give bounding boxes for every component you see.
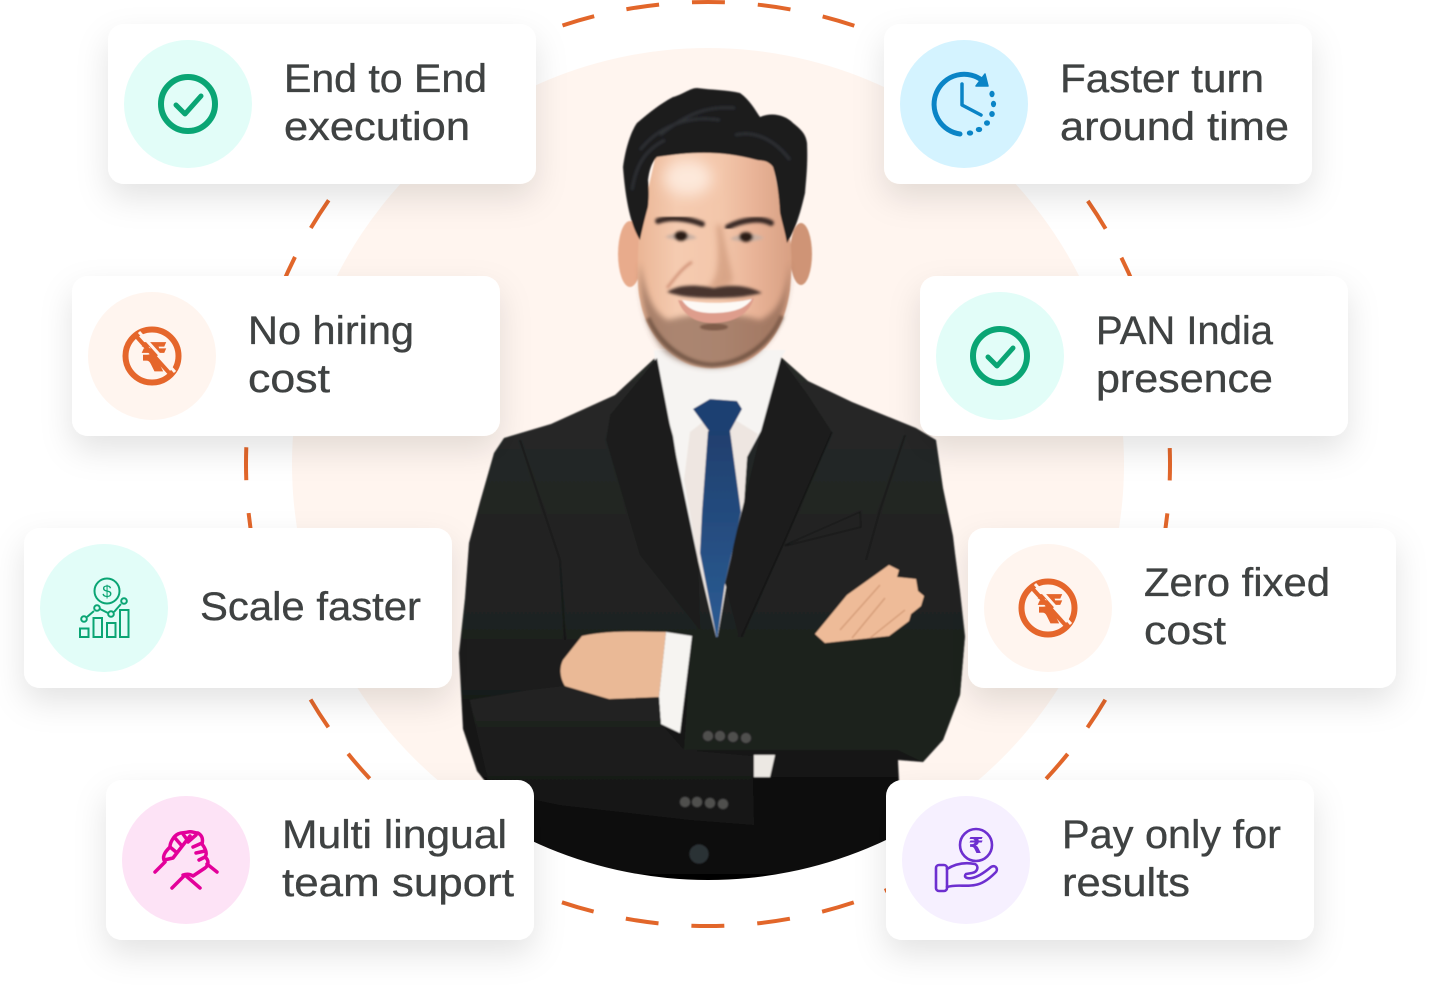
face — [638, 150, 791, 368]
label — [1062, 813, 1281, 905]
card: No hiring cost — [72, 276, 500, 436]
mustache — [667, 285, 762, 298]
icon: no rupee — [88, 292, 216, 420]
jawline stubble — [648, 316, 782, 365]
label: cost — [248, 357, 330, 401]
icon: green check — [124, 40, 252, 168]
right hand — [815, 565, 924, 643]
card: Zero fixed cost — [968, 528, 1396, 688]
label: End to End — [284, 57, 487, 101]
label: around time — [1060, 105, 1289, 149]
portrait: smiling businessman with crossed arms — [459, 88, 965, 885]
card: PAN India presence — [920, 276, 1348, 436]
label: execution — [284, 105, 470, 149]
shirt shading — [684, 418, 758, 640]
label — [1144, 561, 1330, 653]
card: Multi lingual team suport — [106, 780, 534, 940]
ears — [618, 221, 812, 287]
right sleeve — [684, 632, 965, 762]
label — [248, 309, 414, 401]
icon: clock — [900, 40, 1028, 168]
label: No hiring — [248, 309, 414, 353]
eyes — [665, 231, 764, 242]
label: team suport — [282, 861, 514, 905]
hair — [623, 88, 807, 243]
card: Pay only for results — [886, 780, 1314, 940]
peach background circle — [292, 48, 1124, 880]
icon: green check — [936, 292, 1064, 420]
label: Faster turn — [1060, 57, 1264, 101]
label — [1060, 57, 1289, 149]
finger lines — [840, 585, 905, 638]
jacket — [459, 357, 965, 885]
label: Pay only for — [1062, 813, 1281, 857]
forehead highlight — [664, 160, 712, 196]
label — [1096, 309, 1274, 401]
left forearm — [561, 632, 666, 700]
left shirt cuff — [659, 632, 692, 733]
card: Scale faster — [24, 528, 452, 688]
lower sleeve — [470, 686, 754, 825]
label: presence — [1096, 357, 1273, 401]
icon: no rupee: ₹ — [1036, 588, 1064, 633]
label: Zero fixed — [1144, 561, 1330, 605]
beard — [640, 262, 790, 368]
jacket seams — [520, 432, 905, 640]
label — [284, 57, 487, 149]
nose shadow — [706, 225, 733, 289]
smile line — [667, 262, 692, 288]
small cuff — [754, 755, 775, 777]
jacket button — [689, 844, 709, 864]
icon: hand with rupee coin — [902, 796, 1030, 924]
hair strands — [632, 108, 790, 190]
card: End to End execution — [108, 24, 536, 184]
chin patch — [700, 324, 728, 330]
label: results — [1062, 861, 1190, 905]
icon: growth chart with dollar coin: $ — [102, 582, 112, 601]
icon: no rupee — [984, 544, 1112, 672]
label: Scale faster — [200, 585, 421, 629]
shirt — [654, 350, 786, 640]
card: Faster turn around time — [884, 24, 1312, 184]
label — [282, 813, 514, 905]
icon: growth chart with dollar coin — [40, 544, 168, 672]
label: cost — [1144, 609, 1226, 653]
eyebrows — [658, 218, 771, 227]
mouth — [678, 298, 754, 323]
icon: clasped hands — [122, 796, 250, 924]
label: Multi lingual — [282, 813, 507, 857]
dashed orange ring — [246, 2, 1170, 926]
label: PAN India — [1096, 309, 1274, 353]
lapels — [606, 358, 832, 588]
icon: no rupee: ₹ — [140, 336, 168, 381]
icon: hand with rupee coin: ₹ — [968, 834, 984, 859]
sleeve buttons — [680, 730, 752, 810]
tie — [693, 399, 742, 640]
